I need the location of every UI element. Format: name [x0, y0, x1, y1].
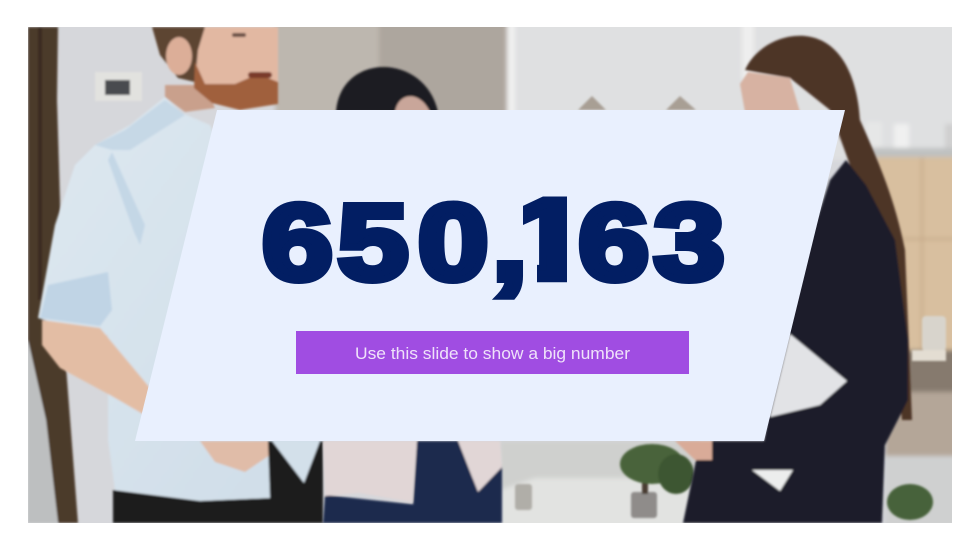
white parallelogram panel	[135, 110, 845, 441]
wall panel	[95, 72, 142, 101]
big number	[262, 196, 724, 300]
woman on the right	[675, 36, 912, 523]
big number: 63	[578, 183, 725, 303]
objects on the shelf	[515, 96, 946, 520]
woman in the centre	[323, 67, 502, 523]
big number: 1	[505, 174, 595, 304]
big number: 650,	[262, 183, 527, 303]
caption text: Use this slide to show a big number	[355, 344, 630, 363]
caption bar	[296, 331, 689, 374]
curtain	[28, 27, 78, 523]
man	[38, 27, 323, 523]
